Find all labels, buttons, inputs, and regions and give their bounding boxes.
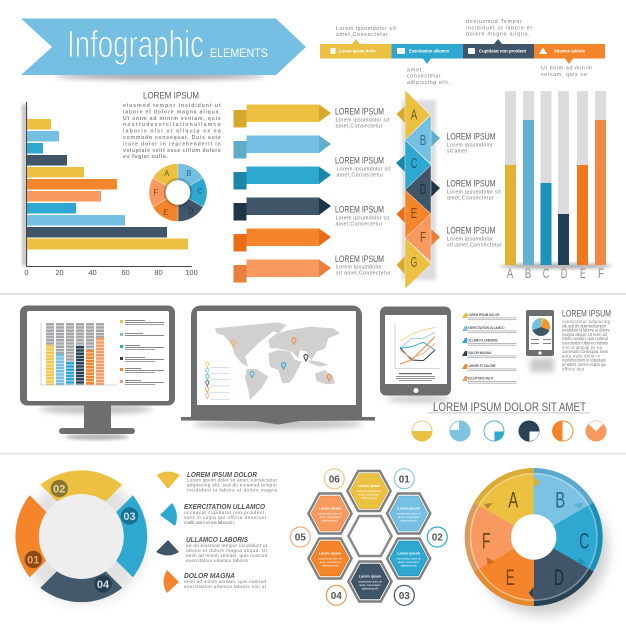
- tab captions: [336, 19, 592, 86]
- tablet: [380, 306, 451, 403]
- legend item 1: [156, 472, 277, 492]
- phone text block: minim veniam, quis nostrud: [562, 336, 609, 341]
- phone text block: proident, sunt in culpa qui: [562, 362, 606, 367]
- small donut chart: D: [188, 206, 193, 216]
- hexagon: peach: adipiscing elit: [322, 518, 338, 522]
- segment: yellow: [40, 470, 122, 526]
- hexagon cluster: [307, 470, 432, 603]
- tablet legend list: LOREM IPSUM DOLOR: [468, 313, 500, 317]
- wedge letters: E: [506, 565, 515, 590]
- arrow list captions: amet,Consectetur: [336, 172, 384, 178]
- tab: yellow: [320, 39, 392, 58]
- legend item 4: exercitation ullamco laboris nisi ut: [184, 584, 267, 589]
- badge 04: [326, 585, 346, 605]
- lorem ipsum text block: eu fugiat nulla.: [123, 154, 168, 160]
- wedge letters: C: [579, 528, 589, 553]
- phone text block: consectetur adipiscing: [562, 319, 611, 324]
- zigzag captions: [446, 132, 502, 248]
- hexagon: blue: Lorem ipsum: [397, 552, 420, 556]
- lorem ipsum text block: nostrudexercitationullamco: [123, 122, 221, 128]
- segmented ring: [15, 470, 147, 603]
- lorem ipsum text block: labore et dolore magna aliqua.: [123, 109, 221, 115]
- arrow list captions: LOREM IPSUM: [335, 106, 384, 116]
- tab: orange: [534, 44, 605, 64]
- circle: half orange: [552, 420, 573, 442]
- hexagon: dark: [347, 560, 393, 603]
- top tab bar: [320, 39, 605, 64]
- arrow 4: [234, 198, 331, 220]
- tab: dark: Cupidatat non proident: [479, 48, 527, 54]
- segment: dark: [40, 547, 122, 602]
- hexagon: dark: consectetur dolor sit: [358, 580, 382, 584]
- phone text block: [562, 308, 611, 371]
- legend item 3: ed do eiusmod tempor incididunt ut: [186, 543, 268, 548]
- tablet legend list: DOLOR MAGNA: [468, 351, 492, 355]
- hexagon: orange: consectetur dolor sit: [318, 556, 342, 560]
- legend item 1: incididunt ut labore et dolore magna: [187, 488, 277, 492]
- hexagon: dark: Lorem ipsum: [359, 574, 381, 578]
- arrow list captions: Lorem ipsumdolor: [336, 264, 382, 270]
- circle: light blue quadrant: [450, 420, 470, 442]
- small donut chart: E: [163, 208, 168, 217]
- arrow 6: [234, 260, 331, 282]
- arrow list captions: Lorem ipsumdolor sit: [336, 216, 390, 222]
- hexagon: orange: [307, 537, 353, 580]
- small donut chart: A: [164, 169, 170, 178]
- axis labels: 40: [88, 268, 97, 277]
- badge 04: 04: [97, 579, 110, 591]
- zigzag captions: sit amet: [447, 148, 467, 154]
- tab captions: dolore magna aliqua.: [466, 32, 530, 38]
- monitor: [20, 306, 175, 440]
- triangle G: [405, 238, 431, 289]
- phone: [526, 310, 554, 372]
- circle: peach with notch: [586, 420, 606, 442]
- lorem ipsum text block: [123, 90, 221, 160]
- tab captions: consectetur: [407, 74, 441, 80]
- hexagon: yellow: consectetur dolor sit: [357, 489, 381, 493]
- axis labels: 20: [55, 268, 64, 277]
- badge 06: 06: [329, 474, 340, 485]
- hexagon: blue: amet, consectetur: [398, 560, 419, 564]
- tab: blue: Exercitation ullamco: [409, 48, 449, 54]
- heading: Infographic: Infographic: [67, 24, 204, 66]
- tablet caption: [396, 373, 435, 381]
- tablet legend list: LABORE ET DOLORE: [468, 364, 496, 368]
- zigzag captions: Lorem ipsumdolor sit: [447, 190, 501, 196]
- triangle B: [405, 115, 431, 164]
- legend item 2: EXERCITATION ULLAMCO: [184, 504, 266, 511]
- bar labels: E: [580, 265, 586, 281]
- hexagon: peach: consectetur dolor sit: [318, 512, 342, 516]
- bar labels: F: [598, 265, 604, 281]
- phone text block: incididunt ut labore et dolore: [562, 328, 611, 333]
- legend item 2: [160, 503, 267, 526]
- axis labels: 100: [185, 268, 198, 277]
- triangle F: [405, 214, 431, 262]
- badge 02: [427, 527, 447, 547]
- legend item 1: LOREM IPSUM DOLOR: [187, 472, 257, 479]
- triangle C: [405, 140, 431, 190]
- tab captions: Lorem ipsumdolor sit: [336, 26, 396, 32]
- heading: Elements: ELEMENTS: [210, 48, 268, 60]
- small donut chart: [140, 156, 216, 229]
- legend item 3: [156, 537, 268, 563]
- wedge A: [474, 451, 564, 537]
- hexagon: blue: [386, 537, 432, 580]
- lorem ipsum text block: Ut enim ad minim veniam, quis: [123, 116, 221, 122]
- tab: dark: [463, 39, 534, 58]
- hexagon: orange: amet, consectetur: [319, 560, 341, 564]
- arrow 5: [234, 228, 331, 252]
- triangle D: [405, 165, 431, 214]
- segment: blue: [92, 495, 147, 577]
- triangle G: G: [411, 254, 417, 271]
- wedge letters: D: [554, 565, 564, 590]
- tab: yellow: Lorem ipsum dolor: [339, 48, 376, 54]
- hexagon: peach: Lorem ipsum: [319, 506, 341, 510]
- wedge B: [534, 468, 593, 537]
- hexagon: yellow: Lorem ipsum: [358, 484, 380, 488]
- arrow list captions: LOREM IPSUM: [335, 204, 384, 214]
- wedge letters: A: [508, 488, 519, 513]
- laptop: [181, 306, 375, 429]
- circle: blue quadrant: [484, 421, 504, 441]
- tablet legend list: ULLAMCO LABORIS: [468, 338, 498, 342]
- legend item 4: DOLOR MAGNA: [184, 573, 235, 580]
- hexagon: light blue: consectetur dolor sit: [397, 512, 421, 516]
- triangle F: F: [420, 229, 426, 246]
- lorem ipsum text block: voluptate velit esse cillum dolore: [123, 148, 221, 154]
- arrow list captions: [335, 106, 391, 276]
- wedge letters: B: [555, 488, 565, 513]
- wedge letters: [482, 488, 589, 590]
- hexagon: dark: adipiscing elit: [362, 586, 378, 590]
- phone text block: elit, sed do eiusmod tempor: [562, 323, 607, 328]
- legend item 2: sunt in culpa qui officia deserunt: [184, 515, 267, 520]
- hexagon: light blue: amet, consectetur: [398, 515, 419, 519]
- title banner: [21, 18, 306, 79]
- bar labels: C: [543, 265, 549, 281]
- triangle B: B: [420, 132, 426, 149]
- tab captions: veniam, quis no: [541, 72, 587, 78]
- center disc: [39, 494, 124, 579]
- wedge E: [474, 537, 534, 606]
- tab captions: amet,Consectetur: [336, 32, 388, 38]
- arrow 2: [234, 136, 331, 158]
- hexagon: peach: amet, consectetur: [319, 515, 341, 519]
- hexagon: yellow: amet, consectetur: [358, 492, 380, 496]
- heading: lorem ipsum dolor sit amet: LOREM IPSUM DOLOR SIT AMET: [433, 400, 587, 414]
- vertical bar chart: [500, 91, 612, 281]
- lorem ipsum text block: commodo consequat. Duis aute: [123, 135, 221, 141]
- lorem ipsum text block: LOREM IPSUM: [143, 90, 199, 100]
- legend item 3: labore et dolore magna aliqua. Ut: [186, 548, 268, 553]
- bar labels: B: [525, 265, 531, 281]
- wedge F: [444, 485, 534, 572]
- arrow list captions: Lorem ipsumdolor sit: [336, 166, 391, 172]
- hexagon: center: [347, 515, 393, 557]
- hexagon: yellow: adipiscing elit: [361, 496, 377, 500]
- hexagon: dark: amet, consectetur: [359, 583, 381, 587]
- stacked column chart: [50, 323, 100, 385]
- hexagon: blue: consectetur dolor sit: [397, 556, 421, 560]
- phone text block: reprehenderit in voluptate: [562, 358, 607, 363]
- zigzag captions: amet,Consectetur: [447, 196, 494, 202]
- badge 02: 02: [53, 484, 65, 496]
- zigzag captions: Lorem ipsumdolor: [447, 236, 493, 242]
- triangle C: C: [411, 155, 417, 172]
- bar labels: [507, 265, 604, 281]
- legend item 1: Lorem ipsum dolor sit amet, consectetur: [187, 478, 277, 482]
- badge 01: 01: [399, 474, 410, 485]
- zigzag captions: LOREM IPSUM: [446, 226, 496, 236]
- tab: blue: [392, 44, 463, 64]
- arrow list captions: Lorem ipsumdolor sit: [336, 118, 390, 124]
- phone text block: aute irure dolor in: [562, 353, 601, 358]
- lorem ipsum text block: laboris nisi ut aliquip ex ea: [123, 129, 221, 135]
- world map: [206, 322, 340, 400]
- zigzag captions: sit amet,Consectetur: [447, 242, 502, 248]
- legend item 3: exercitation ullamco laboris: [186, 558, 249, 563]
- arrow list captions: LOREM IPSUM: [335, 254, 384, 264]
- lorem ipsum text block: eiusmod tempor incididunt ut: [123, 103, 221, 109]
- axis labels: 80: [154, 268, 163, 277]
- triangle E: [405, 190, 431, 238]
- zigzag captions: LOREM IPSUM: [446, 178, 496, 188]
- hexagon number badges: [290, 469, 447, 605]
- zigzag captions: LOREM IPSUM: [446, 132, 496, 142]
- axis labels: 0: [24, 268, 29, 277]
- tab captions: adipiscing elit,: [407, 80, 450, 86]
- legend item 2: occaecat cupidatat non proident,: [184, 510, 266, 515]
- legend item 2: mollit anim id est laborum.: [184, 520, 235, 525]
- map legend: [206, 362, 230, 399]
- bar labels: D: [561, 265, 567, 281]
- hexagon: light blue: Lorem ipsum: [397, 506, 420, 510]
- badge 01: [394, 469, 414, 489]
- chart legend: [120, 320, 164, 385]
- arrow list captions: amet,Consectetur: [336, 222, 383, 228]
- tab captions: doeiusmod Tempor: [466, 19, 522, 25]
- lorem ipsum text block: irure dolor in reprehenderit in: [123, 141, 221, 147]
- map pins: [231, 338, 331, 381]
- legend item 3: enim ad minim veniam, quis nostrud: [186, 553, 267, 558]
- segment: orange: [15, 495, 71, 577]
- arrow list captions: amet,Consectetur: [336, 124, 383, 130]
- wedge C: [534, 502, 623, 589]
- hexagon: light blue: adipiscing elit: [401, 518, 417, 522]
- badge 03: [394, 585, 414, 605]
- hexagon: light blue: [386, 492, 432, 535]
- badge 01: 01: [27, 554, 39, 566]
- axis labels: [24, 268, 198, 277]
- phone text block: exercitation ullamco laboris: [562, 340, 608, 346]
- phone text block: officia des: [562, 366, 584, 371]
- tablet legend list: EXERCITATION ULLAMCO: [468, 326, 505, 330]
- hexagon: blue: adipiscing elit: [401, 564, 417, 568]
- badge 02: 02: [432, 533, 443, 544]
- tab captions: amet,: [407, 68, 424, 74]
- boundary notches: [484, 477, 586, 599]
- zigzag captions: Lorem ipsumdolor: [447, 142, 493, 148]
- tablet legend list: VOLUPTATE VELIT: [468, 376, 494, 380]
- hexagon: yellow: [346, 470, 392, 512]
- arrow list captions: LOREM IPSUM: [335, 156, 384, 166]
- large pie chart: [444, 451, 623, 623]
- circle: dark with white quadrant: [518, 420, 540, 442]
- tab captions: Ut enim ad minim: [541, 66, 592, 72]
- tab: orange: Sitamco laboris: [554, 48, 586, 54]
- small donut chart: B: [186, 169, 192, 178]
- small donut chart: F: [153, 188, 158, 197]
- bar labels: A: [507, 265, 514, 281]
- hexagon: orange: Lorem ipsum: [319, 552, 341, 556]
- triangle E: E: [411, 205, 417, 222]
- legend item 4: [164, 570, 267, 593]
- tablet line chart: [395, 323, 440, 368]
- zigzag triangles A to G: [396, 90, 440, 289]
- arrow list captions: sit amet,Consectetur: [336, 270, 391, 276]
- arrow 1: [234, 104, 331, 128]
- hexagon: peach: [307, 492, 353, 535]
- circle: half yellow: [412, 421, 432, 442]
- hexagon: orange: adipiscing elit: [322, 564, 338, 568]
- ring legend: [156, 472, 277, 593]
- badge 05: [290, 527, 310, 547]
- badge 06: [324, 469, 344, 489]
- legend item 3: ULLAMCO LABORIS: [186, 537, 248, 544]
- badge 05: 05: [295, 533, 306, 544]
- progress circle icons: [412, 420, 606, 442]
- tab captions: incididunt ut labore et: [466, 26, 532, 32]
- side arrows: [396, 106, 440, 274]
- horizontal bar chart: [22, 102, 198, 277]
- phone text block: magna aliqua. Ut enim ad: [562, 332, 608, 337]
- legend item 4: enim ad minim veniam, quis nostrud: [184, 579, 266, 584]
- phone text block: LOREM IPSUM: [562, 308, 611, 318]
- triangle A: A: [411, 106, 417, 124]
- triangle D: D: [420, 181, 426, 198]
- arrow 3: [234, 166, 331, 190]
- phone text block: nisi ut aliquip ex ea: [562, 345, 603, 350]
- tablet legend list: [462, 313, 516, 384]
- small donut chart: C: [198, 187, 203, 196]
- badge 03: 03: [399, 591, 410, 602]
- phone text block: commodo consequat. Duis: [562, 349, 608, 354]
- badge 04: 04: [331, 591, 342, 602]
- wedge letters: F: [482, 528, 491, 553]
- arrow list: [234, 104, 331, 282]
- badge 03: 03: [123, 511, 136, 523]
- triangle A: [405, 90, 430, 140]
- wedge D: [504, 537, 593, 623]
- axis labels: 60: [121, 268, 130, 277]
- legend item 1: adipiscing elit, sed do eiusmod tempor: [187, 482, 277, 488]
- phone pie chart: [532, 318, 550, 336]
